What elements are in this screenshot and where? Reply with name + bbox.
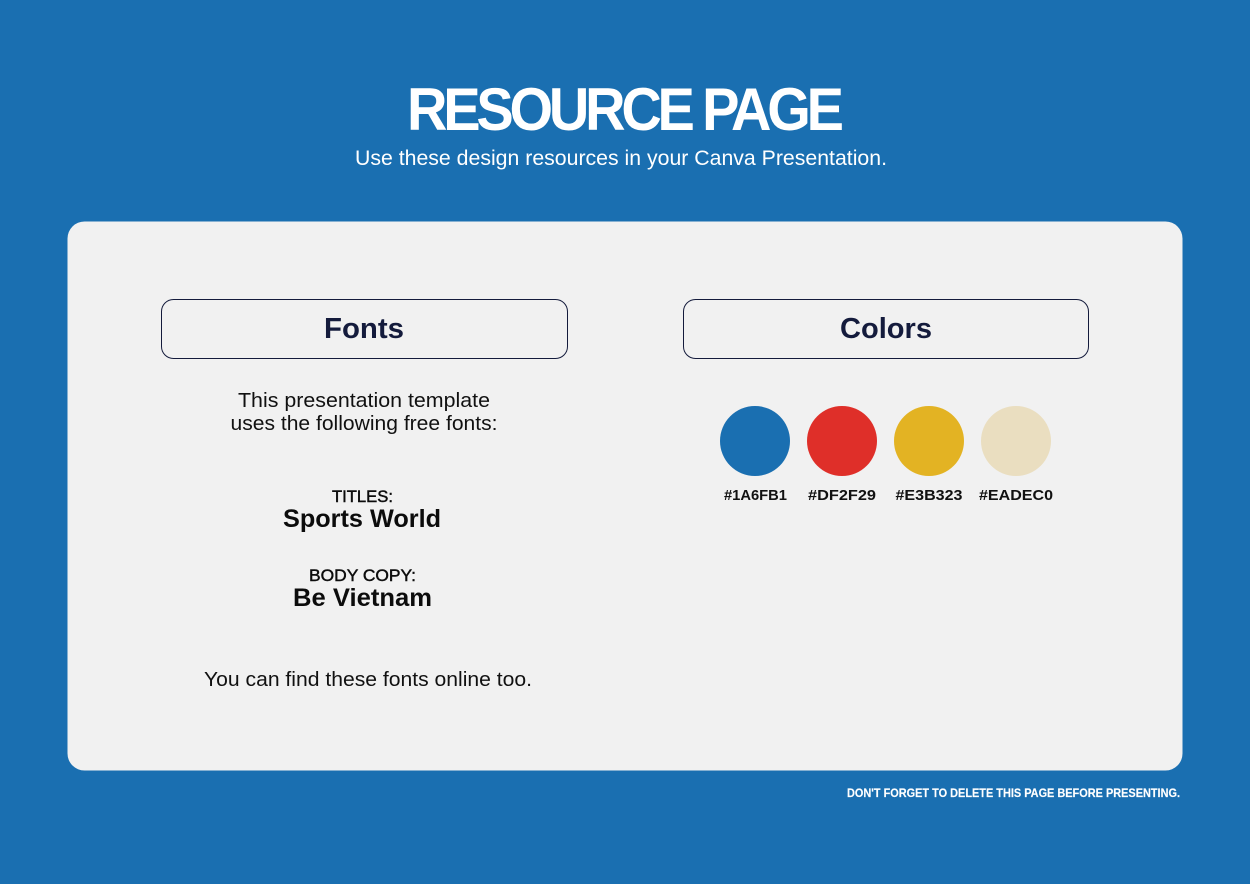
swatch: blue: #1A6FB1	[724, 487, 787, 504]
heading: colors	[684, 300, 1088, 358]
text block: titles font: Sports World	[283, 505, 441, 533]
panel: fonts	[162, 300, 568, 691]
text block: closing note: You can find these fonts online too.	[204, 669, 532, 691]
text block: body copy font: BODY COPY:	[309, 566, 416, 585]
text block: intro: uses the following free fonts:	[230, 413, 498, 435]
footer note: DON'T FORGET TO DELETE THIS PAGE BEFORE PRESENTING.	[847, 788, 1180, 800]
text block: body copy font	[293, 566, 432, 612]
text block: intro	[230, 390, 498, 435]
text block: body copy font: Be Vietnam	[293, 584, 432, 612]
subtitle: Use these design resources in your Canva Presentation.	[355, 147, 887, 170]
panel: colors	[684, 300, 1088, 504]
panel: resources	[68, 222, 1182, 770]
swatch: red	[807, 406, 877, 504]
heading: colors: Colors	[840, 313, 932, 345]
swatch: cream	[979, 406, 1053, 504]
swatch: yellow	[894, 406, 964, 504]
title: RESOURCE PAGE	[407, 77, 844, 143]
swatch: red: #DF2F29	[808, 487, 876, 504]
swatch: blue	[720, 406, 790, 504]
panel background	[68, 222, 1182, 770]
heading: fonts	[162, 300, 568, 358]
heading: fonts: Fonts	[324, 313, 404, 345]
text block: titles font	[283, 487, 441, 533]
text block: intro: This presentation template	[238, 390, 490, 412]
swatch: cream: #EADEC0	[979, 487, 1053, 504]
swatch: yellow: #E3B323	[896, 487, 962, 504]
text block: titles font: TITLES:	[332, 487, 393, 506]
